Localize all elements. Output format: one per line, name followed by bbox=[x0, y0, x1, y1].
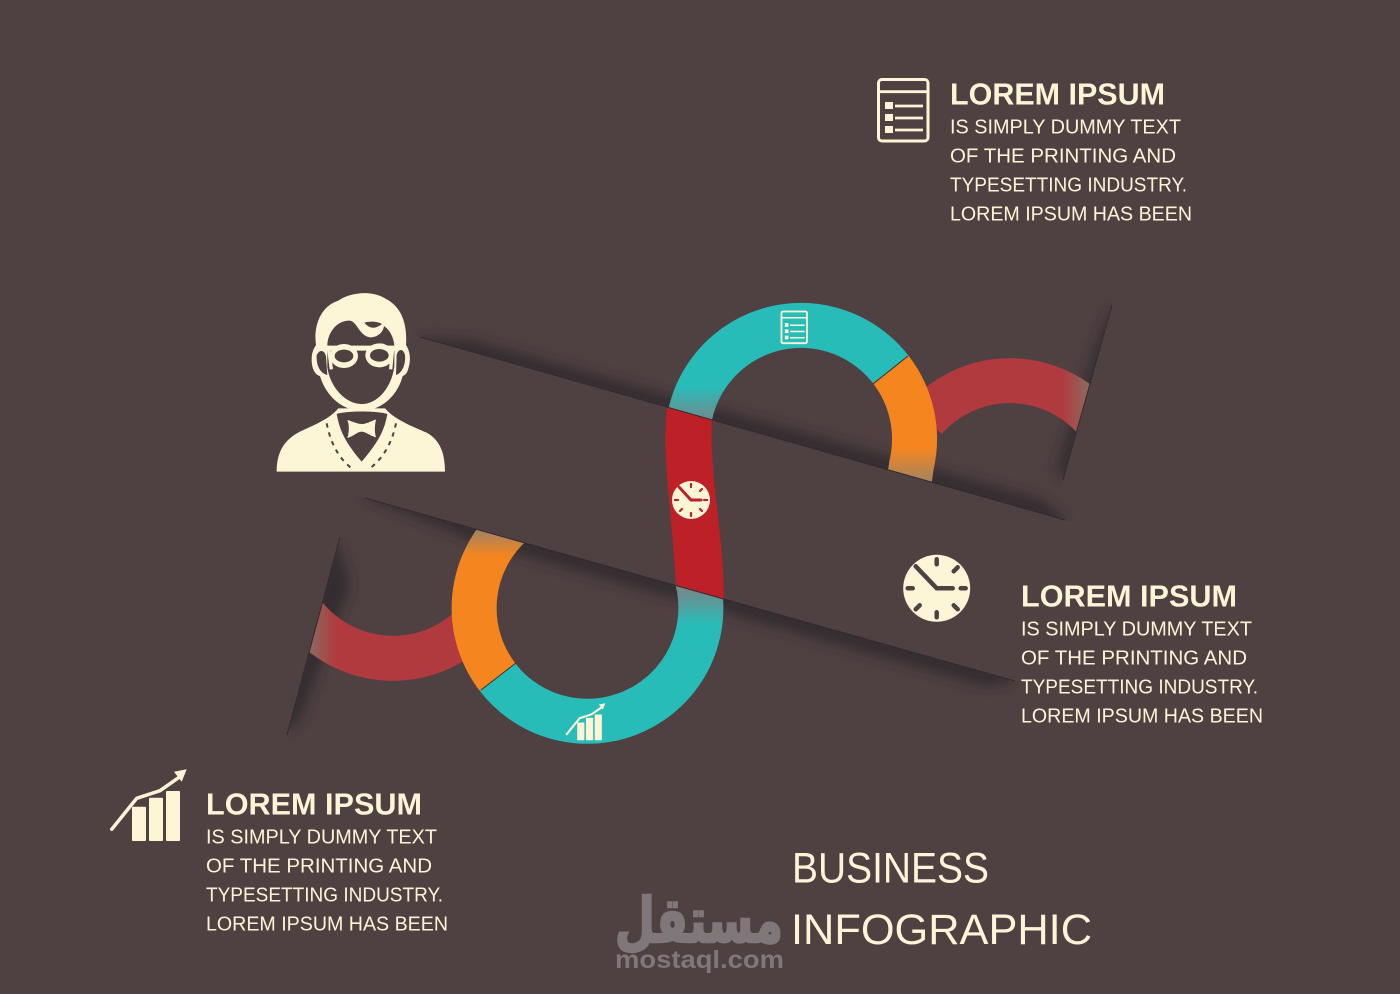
body text: TYPESETTING INDUSTRY. bbox=[1021, 677, 1258, 699]
neck opening bbox=[337, 411, 387, 462]
faded red arc: upper right bbox=[925, 381, 1100, 425]
orange lower arc bbox=[474, 523, 512, 677]
heading: LOREM IPSUM bbox=[1021, 578, 1237, 614]
upper ring bbox=[687, 325, 915, 490]
ears bbox=[317, 350, 405, 375]
block: document bbox=[878, 76, 1192, 226]
icon: clock bbox=[903, 555, 970, 622]
hair curl bbox=[364, 322, 382, 328]
body text: TYPESETTING INDUSTRY. bbox=[950, 175, 1187, 197]
body text: OF THE PRINTING AND bbox=[1021, 648, 1247, 670]
icon: small chart on teal arc bbox=[567, 703, 605, 740]
teal upper arc bbox=[687, 325, 891, 452]
fold shadow: left vertical bbox=[282, 545, 350, 728]
orange upper arc bbox=[891, 369, 915, 490]
body text: OF THE PRINTING AND bbox=[950, 146, 1176, 168]
body bbox=[277, 408, 445, 472]
title bbox=[791, 846, 1092, 954]
body text: IS SIMPLY DUMMY TEXT bbox=[206, 826, 437, 848]
title: BUSINESS bbox=[792, 846, 989, 893]
divider lower bbox=[481, 663, 516, 690]
icon: person with glasses and bow tie bbox=[277, 293, 445, 472]
block: chart bbox=[112, 769, 448, 936]
body text: LOREM IPSUM HAS BEEN bbox=[206, 914, 448, 936]
title: INFOGRAPHIC bbox=[791, 907, 1092, 954]
body text: IS SIMPLY DUMMY TEXT bbox=[1021, 618, 1252, 640]
head and hair bbox=[312, 293, 410, 411]
icon: growth chart bbox=[112, 769, 187, 841]
glasses bbox=[327, 343, 395, 369]
body text bbox=[1021, 618, 1263, 728]
body text: TYPESETTING INDUSTRY. bbox=[206, 885, 443, 907]
fold lines bbox=[287, 305, 1112, 735]
icon: small clock on red band bbox=[672, 481, 710, 519]
red center band bbox=[665, 408, 724, 599]
block: clock bbox=[903, 555, 1263, 728]
fold shadow: upper diagonal bbox=[420, 338, 1062, 530]
body text bbox=[206, 826, 448, 936]
fold shadow: lower diagonal bbox=[368, 488, 1012, 686]
icon: small document on teal arc bbox=[781, 311, 807, 343]
heading: LOREM IPSUM bbox=[950, 76, 1165, 112]
teal lower arc bbox=[498, 568, 701, 721]
face bbox=[327, 321, 394, 404]
fold shadow: right vertical bbox=[1054, 312, 1109, 478]
body text bbox=[950, 116, 1192, 226]
heading: LOREM IPSUM bbox=[206, 786, 422, 822]
lower ring bbox=[474, 523, 701, 721]
watermark: mostaql.com bbox=[615, 946, 784, 974]
watermark: مستقل bbox=[615, 884, 783, 957]
icon: document bbox=[878, 80, 929, 141]
body text: OF THE PRINTING AND bbox=[206, 856, 432, 878]
sweater stitching bbox=[327, 423, 396, 468]
body text: IS SIMPLY DUMMY TEXT bbox=[950, 116, 1181, 138]
body text: LOREM IPSUM HAS BEEN bbox=[1021, 706, 1263, 728]
divider upper bbox=[873, 356, 908, 384]
bow tie bbox=[347, 419, 376, 438]
watermark bbox=[615, 884, 784, 974]
faded red arc: lower left bbox=[303, 614, 478, 658]
body text: LOREM IPSUM HAS BEEN bbox=[950, 204, 1192, 226]
